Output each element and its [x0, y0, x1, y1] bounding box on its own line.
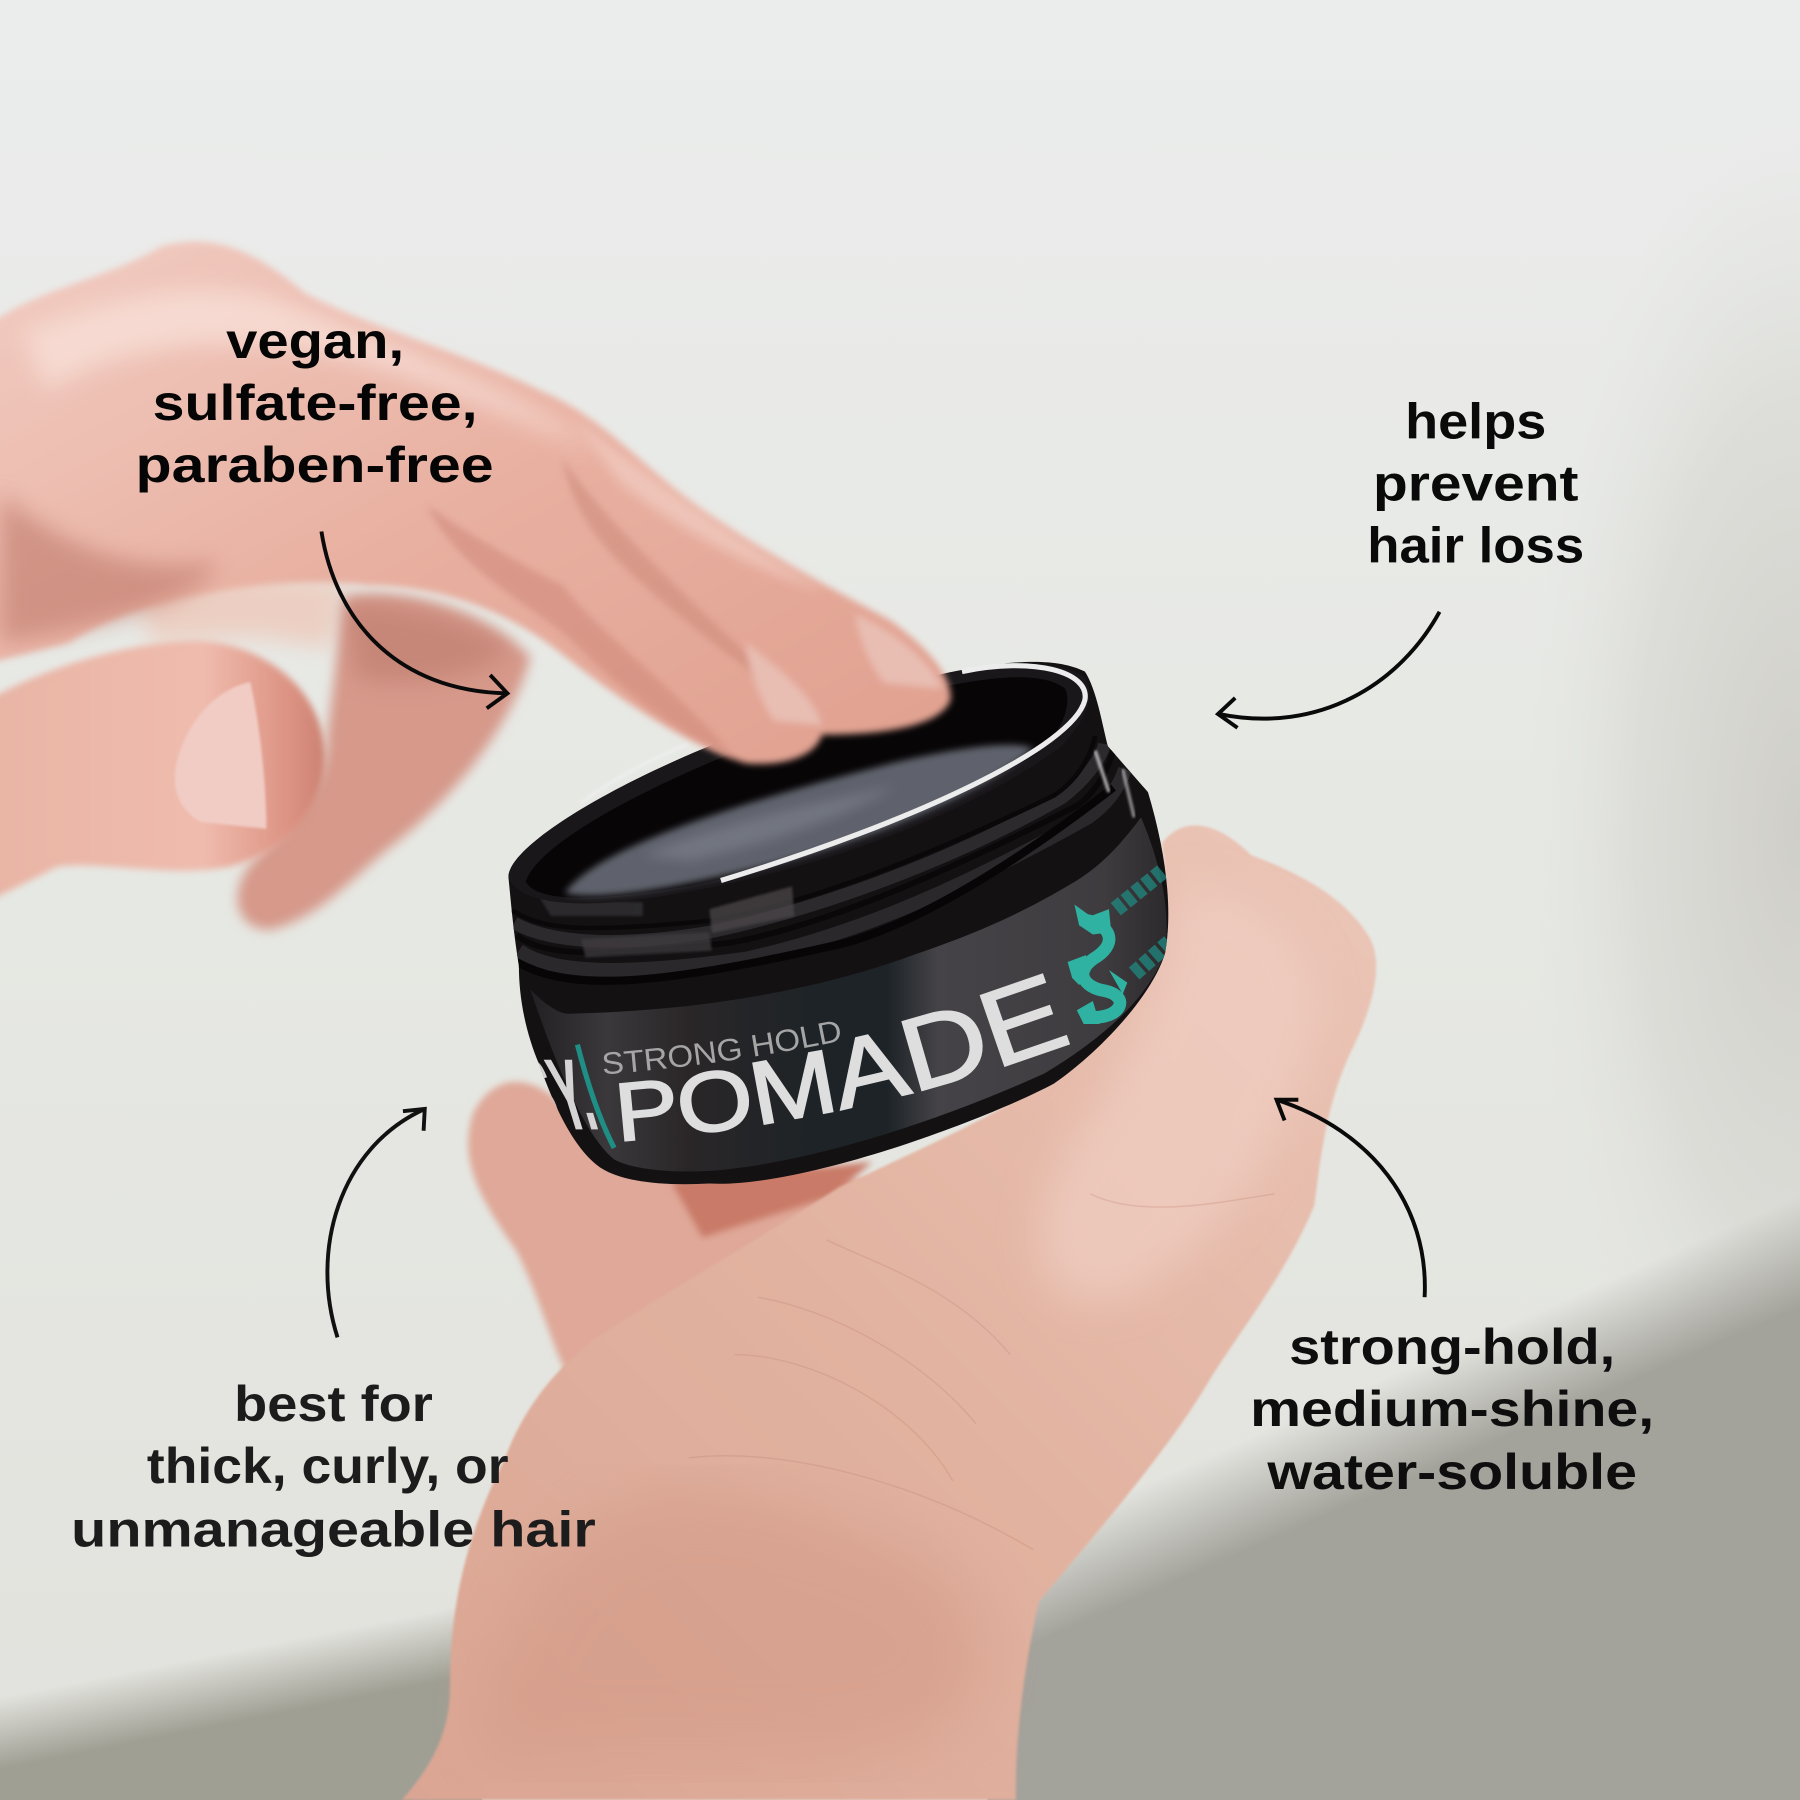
callout: vegan: paraben-free [135, 436, 494, 493]
rim highlight [721, 666, 1085, 880]
arrow: hair type [327, 1109, 425, 1337]
fingernail index [746, 643, 822, 726]
callout: hold [1250, 1318, 1654, 1500]
finger fold [427, 505, 735, 758]
callout: hair loss [1367, 393, 1584, 574]
pomade surface [565, 745, 1033, 896]
jar body [508, 662, 1168, 1184]
callout: hair type: unmanageable hair [71, 1500, 596, 1557]
label text [538, 973, 1070, 1149]
callout: vegan: vegan, [226, 312, 404, 369]
palm creases [689, 1194, 1274, 1550]
callout: vegan [135, 312, 494, 493]
back finger [237, 594, 530, 930]
callout: hold: strong-hold, [1289, 1318, 1615, 1375]
callout: hair type: best for [234, 1375, 433, 1432]
hand and fingers [0, 242, 951, 764]
jar details [512, 736, 1167, 1172]
arrow: hair loss [1218, 612, 1440, 728]
callout: hold: medium-shine, [1250, 1380, 1654, 1437]
strong hold: STRONG HOLD [604, 1022, 840, 1074]
thumbnail [175, 682, 266, 829]
icon: teal dragon [1068, 905, 1127, 1024]
rim [508, 664, 1090, 903]
callout: vegan: sulfate-free, [153, 374, 478, 431]
back finger and thumb web of upper hand [138, 568, 530, 930]
thumb [0, 641, 325, 907]
palm highlight [1039, 884, 1317, 1302]
callout: hair loss: helps [1405, 393, 1546, 450]
wrist shade [482, 1491, 987, 1756]
brand fragment: SY. [509, 1040, 607, 1150]
inner rim [526, 677, 1067, 898]
palm [402, 825, 1376, 1800]
finger highlight [23, 289, 597, 448]
finger top highlight [574, 419, 827, 591]
back finger shadow [344, 603, 511, 682]
teal label text [1116, 870, 1173, 973]
surface light patch [643, 786, 895, 861]
callout: hair loss: prevent [1373, 455, 1579, 512]
web shadow [672, 1162, 872, 1238]
teal divider [577, 1045, 614, 1148]
arrow: vegan [321, 532, 507, 708]
callout: hold: water-soluble [1266, 1443, 1637, 1500]
knuckle shadow [0, 494, 218, 643]
gap shadow between fingers [562, 459, 822, 723]
pomade word: POMADE [619, 973, 1070, 1142]
pomade jar [508, 662, 1168, 1184]
callout: hair type [71, 1375, 596, 1557]
label band [530, 817, 1167, 1172]
lower thumb [468, 1082, 872, 1378]
arrow: hold [1277, 1100, 1425, 1297]
fingernail middle [855, 614, 941, 689]
thread reflections [709, 886, 794, 933]
callout: hair loss: hair loss [1367, 517, 1584, 574]
callout: hair type: thick, curly, or [147, 1437, 509, 1494]
palm web [138, 568, 344, 649]
thread bands [514, 744, 1104, 941]
lower hand [402, 825, 1376, 1800]
upper hand [0, 242, 951, 907]
